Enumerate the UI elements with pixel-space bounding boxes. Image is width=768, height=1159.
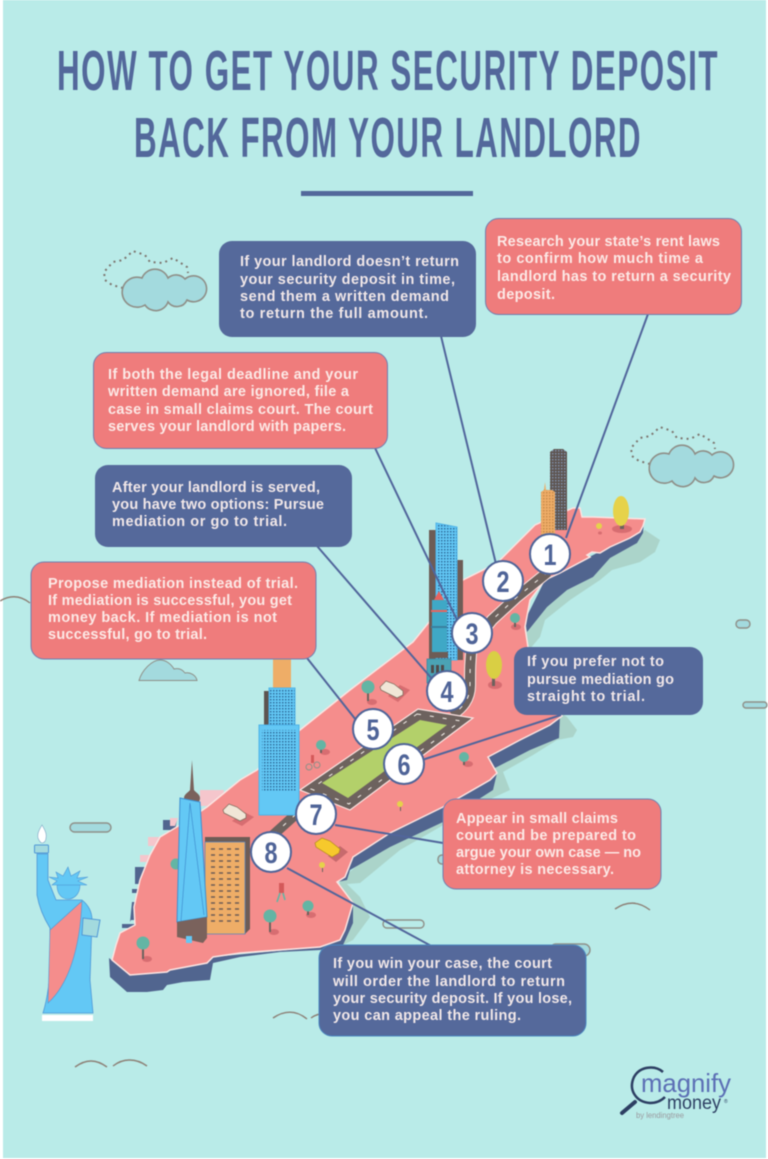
connector lines [287, 314, 648, 948]
logo: magnify money: magnify [641, 1068, 731, 1098]
callout: step 5 mediation [31, 562, 316, 659]
buildings: orange block [205, 837, 250, 934]
callout: step 5 mediation: If mediation is successful, you get [48, 593, 292, 609]
island map [109, 496, 660, 992]
callout: step 5 mediation: successful, go to trial. [48, 627, 207, 643]
cars, cyclist, pedestrian [223, 681, 410, 902]
buildings: left middle tower [259, 655, 299, 815]
logo: magnify money: by lendingtree [636, 1111, 685, 1120]
step marker 7: 7 [310, 799, 322, 832]
road upper [452, 572, 548, 715]
cloud: top right [631, 427, 734, 487]
logo: magnify money [622, 1068, 731, 1120]
step marker 5: 5 [366, 714, 380, 747]
callout: step 7 appear in court: court and be prepared to [456, 828, 636, 844]
step marker 2 [483, 561, 523, 601]
callout: step 4 two options: After your landlord is served, [112, 480, 320, 496]
trees and lights [136, 496, 632, 962]
step marker 8 [251, 832, 291, 872]
buildings: one world trade center [177, 760, 207, 943]
callout: step 1 research: landlord has to return a security [497, 269, 731, 285]
title rule [301, 191, 473, 196]
buildings: north tip pair [541, 449, 567, 535]
callout: step 2 written demand [219, 241, 476, 337]
callout: step 3 small claims: written demand are ignored, file a [107, 384, 350, 400]
callout: step 6 straight to trial: straight to trial. [527, 689, 645, 705]
water shadow [335, 530, 660, 945]
pink land top [112, 508, 645, 975]
callout: step 7 appear in court: Appear in small claims [456, 811, 618, 827]
logo: magnify money: money [667, 1093, 721, 1114]
step marker 1 [530, 534, 570, 574]
callout: step 4 two options: you have two options: Pursue [112, 497, 324, 513]
callout: step 6 straight to trial: pursue mediation go [527, 672, 674, 688]
callout: step 3 small claims [94, 352, 388, 448]
statue of liberty [34, 825, 100, 1021]
cloud: behind mediation callout [139, 660, 197, 680]
callout: step 1 research: Research your state’s rent laws [497, 234, 720, 250]
step marker 4 [427, 671, 467, 711]
west piers [122, 820, 177, 928]
title: BACK FROM YOUR LANDLORD [134, 105, 641, 169]
callout: step 2 written demand: to return the full amount. [240, 306, 428, 322]
step marker 7 [296, 794, 336, 834]
title: HOW TO GET YOUR SECURITY DEPOSIT [57, 38, 718, 102]
callout: step 5 mediation: Propose mediation instead of trial. [48, 576, 298, 592]
title [57, 38, 718, 169]
step marker 5 [353, 709, 393, 749]
callout: step 8 ruling: your security deposit. If you lose, [333, 991, 572, 1007]
callout: step 7 appear in court: argue your own case — no [456, 845, 641, 861]
callout: step 2 written demand: your security deposit in time, [240, 272, 455, 288]
callout: step 5 mediation: money back. If mediation is not [48, 610, 277, 626]
small pill clouds [70, 620, 767, 956]
callout: step 7 appear in court: attorney is necessary. [456, 862, 614, 878]
step marker 6 [384, 744, 424, 784]
callout: step 8 ruling: will order the landlord to return [332, 974, 565, 990]
cloud: top left [104, 251, 207, 311]
callout: step 1 research [486, 218, 742, 314]
callout: step 8 ruling: If you win your case, the court [333, 956, 552, 972]
callout: step 4 two options: mediation or go to trial. [112, 514, 287, 530]
step marker 8: 8 [264, 837, 278, 870]
callout: step 3 small claims: case in small claims court. The court [108, 402, 373, 418]
callout: step 6 straight to trial [514, 647, 703, 715]
step marker 2: 2 [496, 566, 510, 599]
callout: step 1 research: deposit. [497, 287, 555, 303]
step marker 6: 6 [398, 749, 410, 782]
logo: magnify money: ® [724, 1098, 728, 1105]
callout: step 4 two options [95, 465, 352, 547]
step marker 1: 1 [544, 539, 556, 572]
callout: step 3 small claims: serves your landlord with papers. [108, 419, 346, 435]
bird arcs [0, 597, 650, 1067]
buildings: central towers [427, 523, 463, 683]
callout: step 6 straight to trial: If you prefer not to [527, 654, 664, 670]
dark side of island [109, 522, 644, 992]
step marker 3: 3 [466, 618, 478, 651]
callout: step 2 written demand: If your landlord doesn’t return [240, 254, 459, 270]
callout: step 8 ruling: you can appeal the ruling. [333, 1008, 521, 1024]
callout: step 2 written demand: send them a written demand [240, 289, 449, 305]
step marker 4: 4 [440, 676, 454, 709]
park with ring road [300, 709, 473, 810]
road lower [253, 797, 315, 853]
callout: step 7 appear in court [443, 799, 661, 889]
step marker 3 [452, 613, 492, 653]
callout: step 3 small claims: If both the legal deadline and your [108, 367, 358, 383]
callout: step 8 ruling [319, 945, 586, 1036]
callout: step 1 research: to confirm how much time a [497, 251, 704, 267]
